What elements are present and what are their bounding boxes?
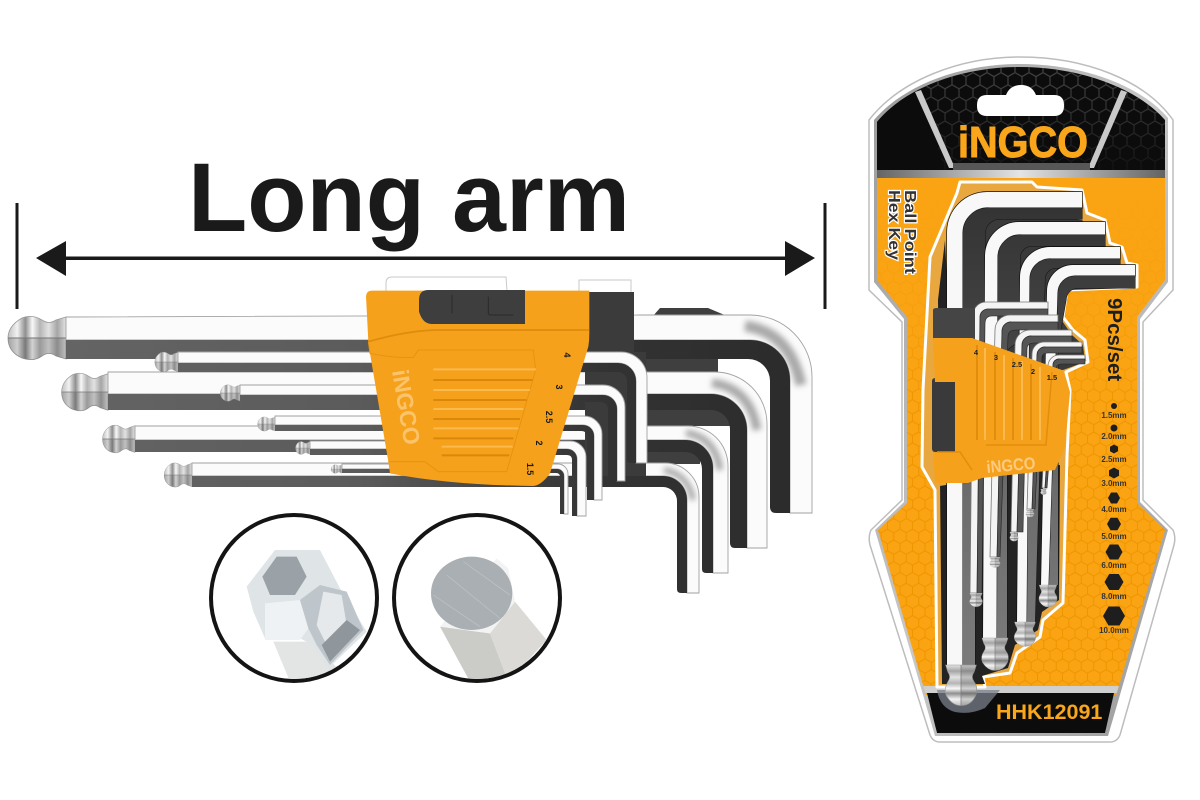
- holder size numbers: 2.5: [544, 411, 554, 423]
- pack silver ring: [874, 64, 1168, 736]
- hex key 8mm: [62, 372, 767, 548]
- pack holder numbers: 1.5: [1047, 373, 1057, 382]
- holder brand: iNGCO: [387, 368, 425, 447]
- orange panel: [877, 178, 1165, 695]
- hang hole: [977, 85, 1064, 116]
- hex key 4mm: [155, 352, 647, 463]
- dark block behind holder: [585, 292, 646, 476]
- holder size numbers: 3: [554, 384, 564, 390]
- title: Long arm: Long arm: [188, 143, 630, 252]
- detail circle: hex end: [394, 515, 560, 682]
- label: Ball Point Hex Key: Hex Key: [885, 190, 902, 260]
- hex key 5mm: [164, 463, 699, 593]
- hexagon size chart: 2.0mm: [1101, 432, 1127, 441]
- pack key 1.5mm: [1040, 355, 1085, 495]
- pack key 8mm: [982, 222, 1105, 670]
- pack holder numbers: 2: [1031, 367, 1035, 376]
- pack key 2.5mm: [1010, 330, 1072, 541]
- panel: blister pack: [860, 57, 1180, 742]
- hexagon size chart: 3.0mm: [1101, 479, 1127, 488]
- label: Ball Point Hex Key: [885, 190, 918, 274]
- hexagon size chart: 10.0mm: [1099, 626, 1129, 635]
- blister bubble around ball: [937, 690, 1000, 713]
- pack key 5mm: [1039, 265, 1135, 607]
- label: Ball Point Hex Key: Ball Point: [901, 190, 918, 274]
- pack holder numbers: [974, 348, 1057, 382]
- pack holder numbers: 3: [994, 353, 998, 362]
- pack key 10mm: [945, 192, 1082, 706]
- arrow: long arm dimension: [16, 203, 826, 309]
- holder size numbers: [525, 352, 572, 475]
- hexagon size chart: 8.0mm: [1101, 592, 1127, 601]
- hex key 1.5mm: [331, 464, 568, 514]
- product: long arm hex key set: [8, 277, 812, 593]
- holder size numbers: 4: [562, 352, 572, 358]
- pack outer frame: [869, 57, 1175, 742]
- hexagon size chart: 4.0mm: [1101, 505, 1127, 514]
- hexagon size chart: 5.0mm: [1101, 532, 1127, 541]
- pack content: [877, 67, 1165, 733]
- pack key 2mm: [1026, 342, 1082, 517]
- brand logo: iNGCO: [958, 118, 1088, 167]
- pack holder: [932, 308, 1070, 483]
- detail circle: ball end: [211, 515, 377, 682]
- pack holder numbers: 4: [974, 348, 979, 357]
- pack holder brand: iNGCO: [986, 454, 1036, 477]
- hex key 6mm: [103, 425, 728, 573]
- hexagon size chart: 2.5mm: [1101, 455, 1127, 464]
- holder size numbers: 1.5: [525, 463, 535, 475]
- header diagonal strips: [915, 90, 955, 168]
- holder: orange clip: [366, 290, 589, 486]
- hexagon size chart: [1099, 403, 1129, 635]
- blister shell: [922, 182, 1137, 687]
- pack holder numbers: 2.5: [1012, 360, 1022, 369]
- hexagon size chart: 1.5mm: [1101, 411, 1127, 420]
- dark fill behind keys: [938, 208, 1135, 684]
- dark fillers between long arms: [630, 308, 735, 464]
- hex key 3mm: [220, 385, 625, 481]
- pack key 3mm: [990, 315, 1058, 567]
- ghost outlines above holder: [386, 277, 631, 292]
- hex key 2.5mm: [258, 416, 602, 500]
- hex key 10mm: [8, 315, 812, 513]
- holder size numbers: 2: [534, 440, 544, 446]
- hexagon size chart: 6.0mm: [1101, 561, 1127, 570]
- black header: [877, 67, 1165, 170]
- silver band: [860, 170, 1180, 178]
- clasp: [419, 290, 525, 324]
- pack key 4mm: [970, 302, 1048, 607]
- footer: [924, 686, 1119, 693]
- hex key 2mm: [296, 441, 586, 516]
- model number: HHK12091: [996, 700, 1102, 724]
- pack key 6mm: [1014, 247, 1120, 646]
- label: 9Pcs/set: 9Pcs/set: [1103, 298, 1126, 381]
